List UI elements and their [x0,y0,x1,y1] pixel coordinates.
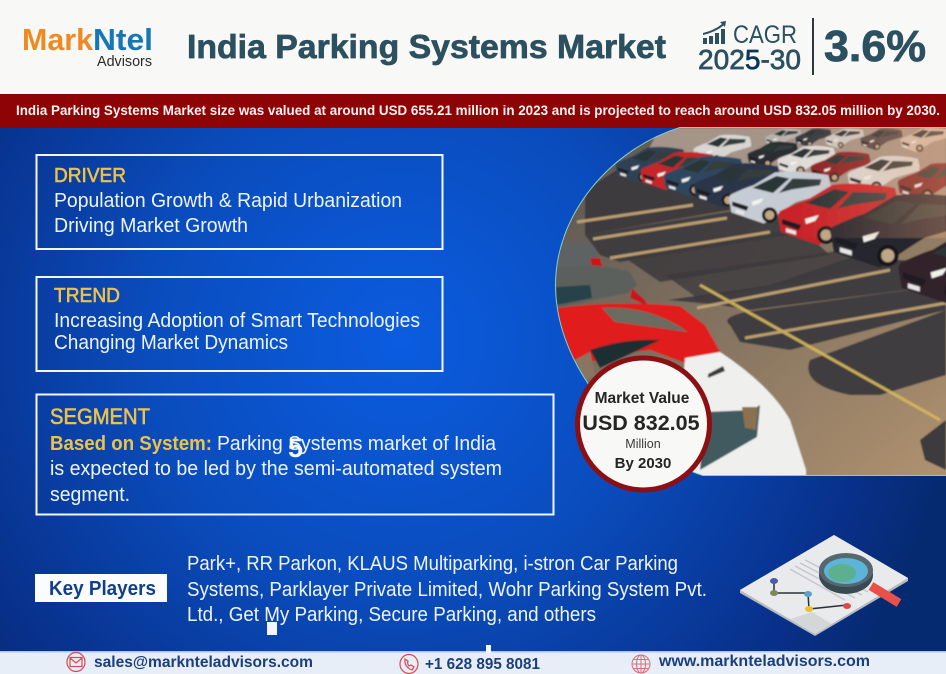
title: India Parking Systems Market [187,28,666,65]
parking lot photo [550,126,946,478]
CAGR label: CAGR [733,21,797,49]
logo: MarkNtel Advisors: Advisors [97,53,152,70]
key players text [187,553,707,626]
contact footer [0,645,946,674]
CAGR period: 2025-30 [698,44,801,75]
segment text: is expected to be led by the semi-automated system [50,458,502,480]
segment text: segment. [50,484,130,506]
icon: document with magnifier [740,535,908,636]
icon: email [67,652,85,672]
website: www.marknteladvisors.com [658,653,870,670]
car backdrop [649,128,946,196]
CAGR value: 3.6% [824,22,926,71]
trend text: Changing Market Dynamics [54,332,288,354]
key players text: Ltd., Get My Parking, Secure Parking, and others [187,604,596,626]
market value badge: Market Value [595,390,690,407]
key players label [35,574,167,602]
divider [812,18,814,75]
stray glyph: 5 [288,433,303,463]
logo: MarkNtel Advisors: Ntel [93,22,153,57]
far row cars [693,128,946,201]
segment text: Based on System: [50,433,212,455]
segment heading: SEGMENT [50,404,150,429]
icon: growth chart [703,21,726,44]
trend heading: TREND [54,285,120,307]
email address: sales@marknteladvisors.com [94,654,313,671]
market value badge: By 2030 [615,455,671,472]
red summary banner [0,94,946,128]
header band [0,0,946,94]
driver text: Population Growth & Rapid Urbanization [54,190,402,212]
market value badge [578,358,710,490]
panel: trend [36,277,442,371]
driver heading: DRIVER [54,165,126,187]
icon: globe [632,655,650,673]
foreground cars [556,241,806,478]
trend text: Increasing Adoption of Smart Technologies [54,310,420,332]
panel: segment [36,394,554,514]
segment text [50,433,502,506]
front row cars [616,147,946,304]
key players label: Key Players [49,578,156,600]
market value badge: Million [625,437,661,451]
icon: phone [400,654,418,674]
key players text: Systems, Parklayer Private Limited, Wohr Parking System Pvt. [187,579,707,601]
segment text: Parking Systems market of India [217,433,497,455]
driver text: Driving Market Growth [54,215,248,237]
driver text [54,190,402,237]
logo: MarkNtel Advisors [22,22,153,70]
trend text [54,310,420,354]
panel: driver [36,155,442,249]
logo: MarkNtel Advisors: Mark [22,22,94,57]
key players text: Park+, RR Parkon, KLAUS Multiparking, i-stron Car Parking [187,553,678,575]
phone number: +1 628 895 8081 [425,656,540,673]
market value badge: USD 832.05 [582,411,700,435]
parking lines [577,205,946,420]
shadows [585,168,946,470]
red summary banner: India Parking Systems Market size was valued at around USD 655.21 million in 2023 and is projected to reach around USD 832.05 million by 2030. [16,103,940,118]
